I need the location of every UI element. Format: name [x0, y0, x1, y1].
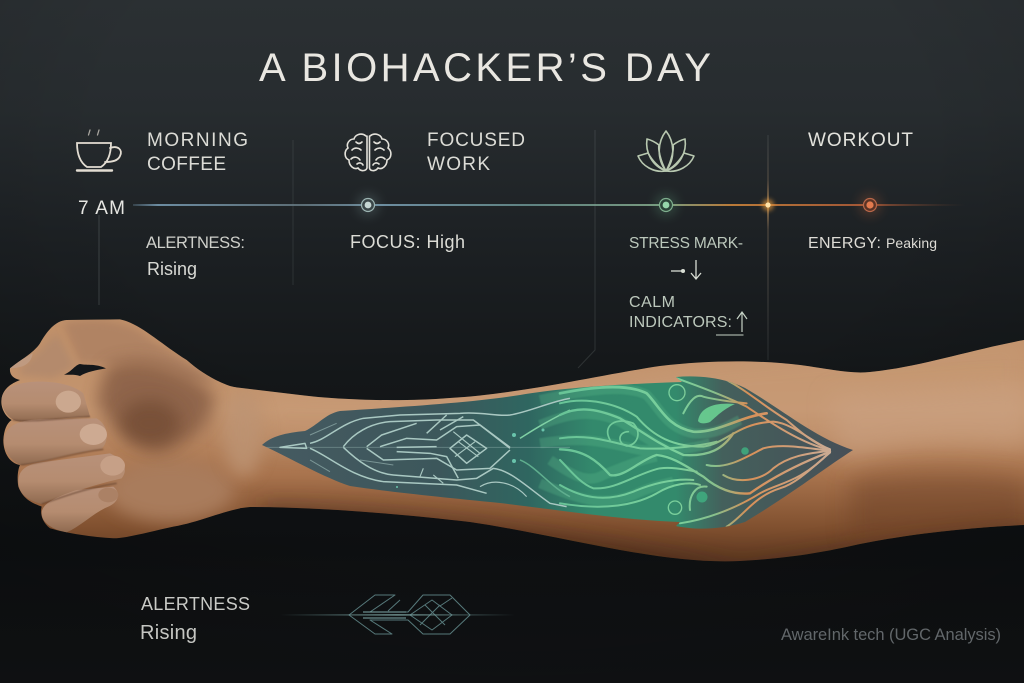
- timeline axis: [133, 204, 965, 206]
- readout: stress markers and calm indicators: STRESS MARK-: [629, 235, 743, 252]
- heading: focused work: WORK: [427, 154, 490, 175]
- timeline node: focused work: [356, 193, 380, 217]
- forearm base: [225, 340, 1024, 561]
- hand details: [2, 353, 125, 532]
- heading: morning coffee: COFFEE: [147, 154, 226, 175]
- dots: [396, 428, 544, 488]
- icon: coffee cup: [77, 130, 121, 170]
- mini tattoo glyph: [280, 595, 515, 634]
- green swirl leaf: [698, 404, 735, 423]
- timeline node: meditation: [654, 193, 678, 217]
- fingers: [2, 382, 90, 422]
- finger separators: [13, 417, 117, 504]
- bottom label: alertness rising: Rising: [140, 622, 197, 644]
- readout: energy peaking: Peaking: [886, 235, 937, 251]
- timeline spark: transition to workout: [762, 135, 774, 360]
- readout: stress markers and calm indicators: INDICATORS:: [629, 314, 732, 331]
- heading: morning coffee: MORNING: [147, 130, 248, 151]
- readout: stress markers and calm indicators: [629, 235, 747, 335]
- heading: focused work: FOCUSED: [427, 130, 525, 151]
- readout: focus high: FOCUS: High: [350, 232, 465, 252]
- icon: calm up arrow: [716, 312, 747, 335]
- thumb gap: [64, 364, 106, 376]
- icon: stress down arrow: [671, 260, 701, 279]
- circuit lines: [250, 398, 570, 507]
- forearm and fist: [1, 319, 1024, 575]
- skin shading: [20, 320, 1024, 575]
- readout: energy peaking: ENERGY:: [808, 235, 881, 252]
- hand base: [1, 319, 240, 538]
- heading: focused work: [427, 130, 525, 175]
- title: A BIOHACKER’S DAY: [259, 46, 711, 90]
- tattoo dots: [696, 447, 749, 502]
- heading: workout: WORKOUT: [808, 130, 913, 151]
- nails: [56, 391, 81, 413]
- readout: alertness rising: [146, 234, 245, 279]
- readout: alertness rising: ALERTNESS:: [146, 234, 245, 252]
- palm shading: [20, 320, 263, 522]
- vertical guide lines: [99, 130, 595, 368]
- timeline start label: 7 AM: 7 AM: [78, 198, 125, 219]
- icon: lotus: [638, 131, 694, 171]
- heading: morning coffee: [147, 130, 248, 175]
- icon: brain: [345, 134, 391, 171]
- tattoo: [262, 376, 853, 529]
- readout: stress markers and calm indicators: CALM: [629, 294, 675, 311]
- thumb nail: [10, 353, 33, 368]
- readout: energy peaking: [808, 235, 937, 252]
- flowing lines: [560, 378, 830, 527]
- bottom label: alertness rising: [140, 594, 250, 644]
- timeline node: workout: [858, 193, 882, 217]
- source credit: AwareInk tech (UGC Analysis): [781, 626, 1001, 644]
- readout: alertness rising: Rising: [147, 259, 197, 279]
- green bands: [540, 389, 740, 501]
- bottom label: alertness rising: ALERTNESS: [141, 594, 250, 614]
